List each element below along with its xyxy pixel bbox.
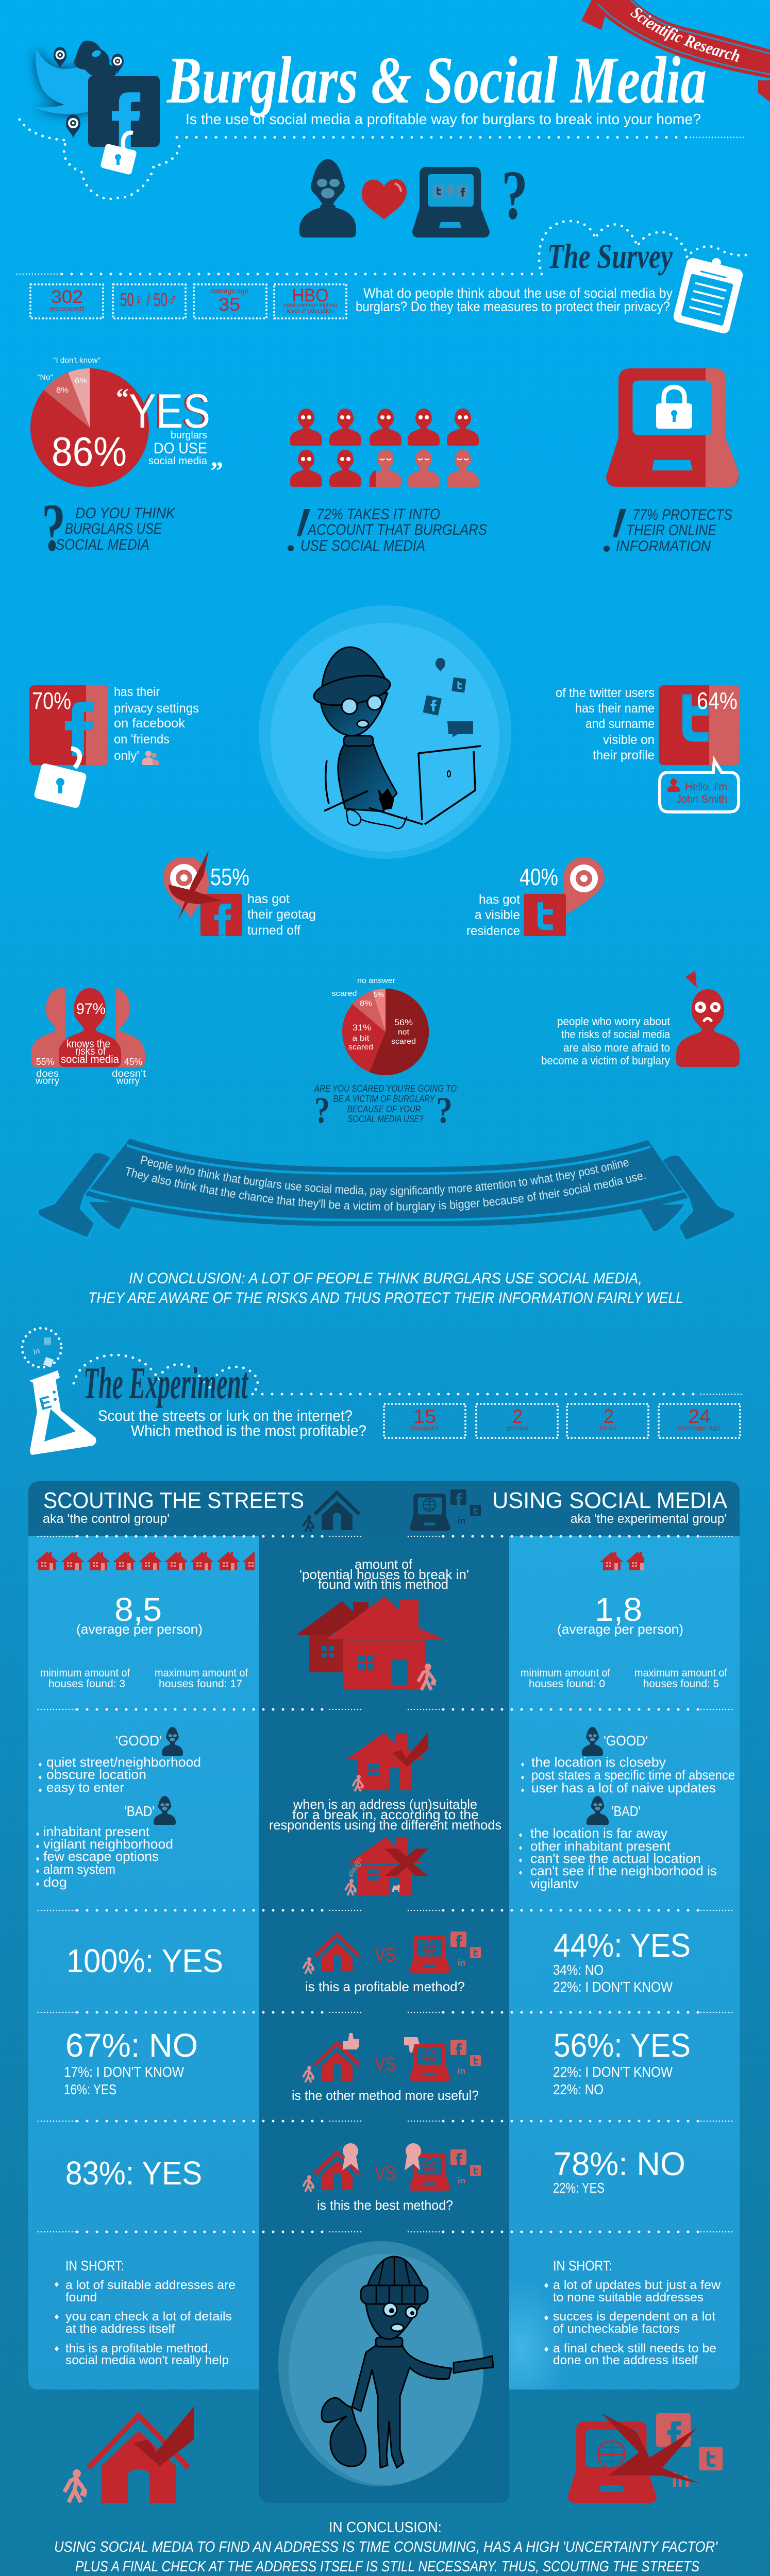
- burglar icon: [299, 159, 356, 238]
- houses found row: center: [296, 1556, 469, 1690]
- min and max: minimum amount of: [40, 1667, 130, 1679]
- in short: left: this is a profitable method,: [65, 2342, 211, 2355]
- know the risks: 97 percent: 45%: [124, 1057, 142, 1067]
- survey intro text: [356, 285, 673, 314]
- spotlight circle: [259, 605, 511, 859]
- visible residence: 40 percent: has got: [479, 892, 520, 907]
- icon: flask with social bubble: [22, 1328, 96, 1455]
- in short: right: [544, 2258, 721, 2367]
- know the risks: 97 percent: social media: [61, 1054, 119, 1065]
- hat: [367, 2257, 424, 2287]
- question: are you scared: BE A VICTIM OF BURGLARY: [333, 1094, 436, 1104]
- know the risks: 97 percent: risks of: [75, 1045, 106, 1057]
- experiment stat boxes: average age: [678, 1424, 721, 1431]
- survey intro text: What do people think about the use of social media by: [363, 285, 673, 301]
- mouth: [391, 2324, 404, 2331]
- geotag off: 55 percent: 55%: [210, 863, 249, 890]
- houses found row: left: houses found: 3: [48, 1678, 125, 1690]
- houses found row: left: maximum amount of: [155, 1667, 248, 1679]
- pie chart: scared of burglary: not: [398, 1028, 410, 1037]
- question row: is this a profitable method: [66, 1927, 691, 1995]
- pie chart: scared of burglary: 5%: [374, 990, 384, 999]
- question: do you think burglars use social media: SOCIAL MEDIA: [56, 536, 149, 553]
- suitability: right: user has a lot of naive updates: [531, 1780, 716, 1795]
- question row: is the other method more useful: 56%: YES: [554, 2027, 691, 2064]
- face: [366, 2303, 422, 2339]
- houses found row: center: 'potential houses to break in': [299, 1567, 469, 1582]
- houses found row: left: houses found: 17: [159, 1678, 242, 1690]
- pie chart: do burglars use social media: "I don't know": [53, 356, 101, 365]
- in short: right: a final check still needs to be: [553, 2342, 716, 2355]
- question row: is this the best method: is this the best method?: [317, 2197, 453, 2213]
- pie chart: scared of burglary: no answer: [357, 976, 395, 985]
- privacy text: on 'friends: [114, 732, 170, 747]
- question row: is the other method more useful: 16%: YES: [64, 2081, 116, 2097]
- subtitle: Is the use of social media a profitable way for burglars to break into your home?: [186, 111, 701, 128]
- question row: is this the best method: [65, 2143, 685, 2213]
- suitability: right: the location is far away: [530, 1825, 667, 1841]
- in short: left: [55, 2258, 236, 2367]
- banner band: [85, 1139, 688, 1226]
- geotag off: 55 percent: their geotag: [247, 907, 316, 922]
- suitability: right: the location is closeby: [531, 1754, 666, 1770]
- stat: gender: [113, 284, 186, 318]
- suitability: center: for a break in, according to the: [292, 1807, 479, 1822]
- worried person: become a victim of burglary: [541, 1054, 670, 1067]
- question row: is this the best method: 83%: YES: [65, 2155, 202, 2192]
- pie chart: do burglars use social media: 8%: [56, 386, 69, 395]
- question row: is the other method more useful: 67%: NO: [65, 2027, 198, 2064]
- worried person: people who worry about: [557, 1015, 670, 1028]
- suitability: right: 'GOOD': [604, 1733, 648, 1749]
- privacy text: has their: [114, 685, 160, 699]
- experiment stat boxes: 2: [512, 1406, 523, 1428]
- banner: [36, 1139, 737, 1243]
- mouse and cable: [346, 810, 407, 828]
- header: scouting the streets: SCOUTING THE STREETS: [43, 1488, 304, 1513]
- header: using social media: in: [458, 1516, 465, 1526]
- privacy text: [114, 685, 199, 763]
- houses found row: center: found with this method: [318, 1577, 448, 1592]
- header: using social media: [410, 1488, 728, 1531]
- icon: tablet with cross: in: [672, 2469, 690, 2492]
- in short: left: at the address itself: [65, 2322, 175, 2336]
- know the risks: 97 percent: 55%: [36, 1057, 54, 1067]
- facebook privacy: 70 percent: [29, 685, 199, 809]
- quote: yes burglars do use social media: ”: [210, 456, 223, 485]
- name text: [556, 686, 655, 762]
- medal: [342, 2154, 359, 2171]
- question: do you think burglars use social media: DO YOU THINK: [75, 505, 176, 522]
- question: are you scared: [314, 1083, 457, 1131]
- suitability: center: respondents using the different methods: [269, 1817, 501, 1833]
- question: are you scared: ?: [436, 1090, 453, 1131]
- quote: yes burglars do use social media: YES: [129, 384, 210, 438]
- suitability: left: easy to enter: [46, 1780, 124, 1795]
- conclusion: survey: IN CONCLUSION: A LOT OF PEOPLE THINK BURGLARS USE SOCIAL MEDIA,: [129, 1270, 642, 1287]
- visible residence: 40 percent: [466, 857, 605, 938]
- houses found row: right: houses found: 5: [643, 1678, 719, 1690]
- speech bubble: hello I'm John Smith: Hello, I'm: [685, 781, 727, 793]
- eyes: [342, 699, 357, 714]
- stat: education: level of education: [287, 307, 334, 314]
- finding: 72 percent: USE SOCIAL MEDIA: [300, 537, 425, 554]
- back house: [296, 1601, 369, 1672]
- mouth: [357, 720, 369, 727]
- suitability: left: quiet street/neighborhood: [46, 1754, 201, 1770]
- question row: is the other method more useful: [64, 2027, 691, 2103]
- flashlight: [454, 2356, 493, 2373]
- experiment intro text: Which method is the most profitable?: [131, 1422, 366, 1439]
- suitability: right: [519, 1727, 735, 1891]
- question row: is this a profitable method: 22%: I DON'T KNOW: [553, 1979, 673, 1995]
- question row: is this the best method: in: [458, 2176, 465, 2185]
- pie chart: do burglars use social media: "No": [37, 373, 53, 382]
- twitter profile: 64 percent: [556, 685, 740, 812]
- suitability: left: dog: [43, 1874, 67, 1890]
- header: using social media: aka 'the experimental group': [571, 1512, 727, 1526]
- suitability: right: can't see if the neighborhood is: [530, 1863, 717, 1878]
- houses found row: right: houses found: 0: [529, 1678, 605, 1690]
- experiment intro text: [98, 1408, 366, 1439]
- speech bubble: hello I'm John Smith: [660, 760, 739, 812]
- finding: 77 percent: [604, 506, 732, 555]
- legs and torso: [352, 2346, 451, 2468]
- experiment stat boxes: groups: [507, 1424, 528, 1431]
- question: are you scared: BECAUSE OF YOUR: [347, 1104, 421, 1114]
- beanie hat: [322, 647, 388, 685]
- conclusion: experiment: [54, 2519, 718, 2576]
- experiment intro text: Scout the streets or lurk on the internet?: [98, 1408, 353, 1425]
- conclusion: experiment: IN CONCLUSION:: [329, 2519, 442, 2536]
- know the risks: 97 percent: does: [36, 1069, 59, 1079]
- privacy text: only': [114, 749, 139, 763]
- finding: 77 percent: THEIR ONLINE: [626, 522, 717, 539]
- suitability: right: post states a specific time of absence: [531, 1767, 735, 1783]
- icon: clipboard: [672, 251, 745, 335]
- question row: is this a profitable method: VS: [375, 1944, 396, 1966]
- laptop icon: [412, 167, 490, 238]
- survey stat boxes: [30, 284, 346, 318]
- suitability: right: can't see the actual location: [530, 1851, 701, 1866]
- worried person: [541, 971, 740, 1067]
- houses found row: right: [521, 1552, 727, 1690]
- stat: age: [194, 284, 266, 318]
- question: do you think burglars use social media: [42, 489, 176, 565]
- name text: visible on: [603, 733, 655, 747]
- pie chart: do burglars use social media: 86%: [52, 429, 127, 474]
- house with cross: #%@!: [346, 1856, 364, 1879]
- burglar hand: [379, 788, 394, 810]
- burglar body: [338, 744, 397, 811]
- loot bag: [322, 2398, 366, 2466]
- houses found row: right: minimum amount of: [521, 1667, 610, 1679]
- in short: left: a lot of suitable addresses are: [65, 2278, 236, 2292]
- pie chart: scared of burglary: 31%: [353, 1023, 371, 1032]
- question row: is this the best method: 22%: YES: [553, 2180, 605, 2196]
- question row: is the other method more useful: in: [458, 2066, 465, 2076]
- front house: [326, 1597, 444, 1690]
- conclusion: survey: THEY ARE AWARE OF THE RISKS AND THUS PROTECT THEIR INFORMATION FAIRLY WELL: [88, 1290, 683, 1307]
- pie chart: scared of burglary: 8%: [360, 999, 372, 1008]
- suitability: right: other inhabitant present: [530, 1838, 671, 1854]
- icon: friends: [142, 751, 159, 765]
- in short: right: IN SHORT:: [553, 2258, 612, 2274]
- finding: 72 percent: [288, 506, 487, 554]
- question row: is this a profitable method: in: [458, 1958, 465, 1968]
- question: do you think burglars use social media: ?: [42, 489, 65, 565]
- geotag off: 55 percent: has got: [247, 892, 290, 906]
- suitability: left: alarm system: [43, 1861, 115, 1877]
- people grid: 72 percent: [290, 409, 479, 487]
- visible residence: 40 percent: 40%: [520, 863, 558, 890]
- stat: gender: 50♀ / 50♂: [120, 289, 177, 310]
- visible residence: 40 percent: residence: [466, 924, 520, 938]
- finding: 72 percent: 72% TAKES IT INTO: [316, 506, 440, 523]
- in short: left: found: [65, 2291, 97, 2304]
- know the risks: 97 percent: knows the: [66, 1038, 110, 1050]
- suitability: left: inhabitant present: [43, 1824, 150, 1839]
- houses found row: left: (average per person): [76, 1621, 203, 1637]
- question row: is the other method more useful: 22%: I DON'T KNOW: [553, 2064, 673, 2080]
- houses found row: right: 1,8: [595, 1591, 642, 1628]
- worried person: are also more afraid to: [563, 1041, 670, 1054]
- pie chart: scared of burglary: scared: [348, 1043, 373, 1052]
- worried person: the risks of social media: [561, 1028, 671, 1041]
- table dividers: [38, 1536, 732, 2232]
- speech bubble: hello I'm John Smith: John Smith: [676, 793, 727, 805]
- question: are you scared: ARE YOU SCARED YOU'RE GOING TO: [314, 1083, 457, 1094]
- laptop and desk lines: [324, 746, 481, 824]
- name text: has their name: [575, 701, 655, 716]
- name text: of the twitter users: [556, 686, 655, 700]
- house with cross: [345, 1837, 428, 1895]
- know the risks: 97 percent: [31, 988, 146, 1087]
- suitability: left: vigilant neighborhood: [43, 1836, 173, 1852]
- pie chart: scared of burglary: scared: [391, 1037, 416, 1046]
- finding: 77 percent: INFORMATION: [616, 538, 711, 555]
- finding: 72 percent: ACCOUNT THAT BURGLARS: [307, 521, 487, 538]
- houses found row: right: (average per person): [557, 1621, 683, 1637]
- icon: flask with social bubble: E: [37, 1392, 54, 1414]
- pie chart: scared of burglary: [332, 976, 429, 1075]
- heading: the survey: [17, 221, 746, 276]
- know the risks: 97 percent: 97%: [76, 1001, 106, 1018]
- conclusion: survey: [88, 1270, 683, 1307]
- stat: respondents: respondents: [49, 304, 85, 312]
- stat: age: average age: [210, 286, 248, 295]
- in short: right: a lot of updates but just a few: [553, 2278, 721, 2292]
- privacy text: privacy settings: [114, 701, 199, 716]
- houses found row: left: [35, 1552, 266, 1690]
- heading: the experiment: The Experiment: [83, 1359, 248, 1409]
- stat: education: [274, 284, 346, 318]
- question row: is the other method more useful: 22%: NO: [553, 2081, 604, 2097]
- banner: They also think that the chance that they'll be a victim of burglary is bigger because of their social media use.: [126, 1166, 646, 1213]
- question row: is this a profitable method: 44%: YES: [554, 1927, 691, 1964]
- burglar at the computer: [312, 647, 481, 828]
- heart icon: [362, 179, 407, 219]
- comparison table panels: [28, 1481, 740, 2503]
- pie chart: scared of burglary: 56%: [394, 1018, 413, 1027]
- question row: is this a profitable method: 34%: NO: [553, 1962, 604, 1978]
- experiment stat boxes: 'burglars': [410, 1424, 440, 1431]
- neck: [344, 736, 373, 746]
- ribbon: scientific research: [581, 0, 770, 102]
- question: do you think burglars use social media: BURGLARS USE: [65, 520, 162, 537]
- burglar loves social media?: [299, 157, 528, 238]
- quote: yes burglars do use social media: burglars: [171, 430, 207, 441]
- quote: yes burglars do use social media: YES: [127, 384, 208, 438]
- neck: [376, 2337, 403, 2347]
- house icons: [35, 1552, 266, 1570]
- in short: left: social media won't really help: [65, 2353, 229, 2367]
- stat: education: HBO: [292, 285, 329, 306]
- know the risks: 97 percent: doesn't: [112, 1069, 146, 1079]
- burglar face: [321, 693, 388, 736]
- experiment stat boxes: [384, 1404, 740, 1438]
- suitability: left: 'GOOD': [115, 1733, 162, 1749]
- in short: right: to none suitable addresses: [553, 2291, 704, 2304]
- social icons floating: [423, 658, 473, 737]
- question row: is this a profitable method: is this a profitable method?: [305, 1979, 465, 1994]
- question row: is the other method more useful: 17%: I DON'T KNOW: [64, 2064, 184, 2080]
- dotted connector: title: [20, 120, 746, 199]
- icon: flask with social bubble: in: [32, 1346, 41, 1357]
- geotag off: 55 percent: turned off: [247, 923, 300, 938]
- red laptop with lock: [606, 368, 739, 487]
- header: scouting the streets: aka 'the control group': [43, 1512, 170, 1526]
- in short: right: done on the address itself: [553, 2353, 698, 2367]
- suitability: left: [36, 1727, 201, 1890]
- burglar with flashlight and loot: [322, 2257, 493, 2468]
- suitability: left: obscure location: [46, 1767, 146, 1782]
- experiment stat boxes: 15: [413, 1406, 436, 1428]
- question row: is the other method more useful: VS: [375, 2054, 396, 2075]
- know the risks: 97 percent: worry: [35, 1076, 59, 1087]
- quote: yes burglars do use social media: “: [116, 383, 129, 412]
- icon: tablet with cross: [568, 2413, 723, 2503]
- houses found row: right: maximum amount of: [634, 1667, 727, 1679]
- suitability: right: 'BAD': [611, 1803, 641, 1819]
- name text: and surname: [585, 717, 655, 731]
- question: are you scared: SOCIAL MEDIA USE?: [347, 1114, 424, 1124]
- question row: is this the best method: VS: [375, 2163, 396, 2184]
- pie chart: do burglars use social media: [30, 356, 149, 487]
- heading: the experiment: [74, 1355, 744, 1409]
- eyes: [383, 2303, 397, 2316]
- in short: left: IN SHORT:: [65, 2258, 124, 2274]
- question: are you scared: ?: [314, 1090, 330, 1131]
- experiment stat boxes: hours: [600, 1424, 616, 1431]
- in short: left: you can check a lot of details: [65, 2310, 232, 2324]
- pie chart: do burglars use social media: 6%: [75, 377, 87, 385]
- in short: right: of uncheckable factors: [553, 2322, 680, 2336]
- geotag off: 55 percent: [163, 850, 316, 938]
- experiment stat boxes: 2: [604, 1406, 614, 1428]
- ribbon text: Scientific Research: [630, 8, 740, 62]
- quote: yes burglars do use social media: [116, 383, 223, 485]
- logo: twitter bird, facebook and open lock: [35, 41, 160, 175]
- header: using social media: USING SOCIAL MEDIA: [492, 1488, 728, 1513]
- question row: is the other method more useful: is the other method more useful?: [292, 2088, 479, 2103]
- stat: respondents: [30, 284, 103, 318]
- question mark: ?: [501, 157, 528, 234]
- question row: is this the best method: 78%: NO: [554, 2145, 685, 2182]
- privacy text: on facebook: [114, 716, 186, 731]
- icon: house with check: [64, 2406, 194, 2503]
- suitability: left: 'BAD': [124, 1803, 155, 1819]
- survey intro text: burglars? Do they take measures to protect their privacy?: [356, 299, 670, 314]
- suitability: center: [269, 1732, 501, 1895]
- visible residence: 40 percent: a visible: [475, 908, 520, 922]
- suitability: right: vigilantv: [530, 1876, 578, 1891]
- stat: respondents: 302: [51, 287, 83, 307]
- twitter profile: 64 percent: 64%: [697, 687, 738, 714]
- quote: yes burglars do use social media: DO USE: [154, 440, 207, 457]
- thumbs down: [404, 2037, 420, 2053]
- experiment stat boxes: 24: [688, 1406, 711, 1428]
- banner tails: [37, 1151, 137, 1239]
- suitability: center: when is an address (un)suitable: [293, 1797, 477, 1812]
- facebook privacy: 70 percent: 70%: [32, 687, 71, 714]
- in short: right: succes is dependent on a lot: [553, 2310, 715, 2324]
- medal: [405, 2154, 420, 2171]
- finding: 77 percent: 77% PROTECTS: [632, 506, 732, 523]
- houses found row: center: amount of: [355, 1556, 413, 1572]
- stat: age: 35: [219, 295, 240, 315]
- average: 8,5: [114, 1591, 162, 1628]
- spotlight: [278, 2241, 483, 2486]
- header: scouting the streets: [43, 1488, 359, 1532]
- quote: yes burglars do use social media: social media: [148, 455, 208, 467]
- pie chart: scared of burglary: a bit: [353, 1034, 370, 1043]
- suitability: left: few escape options: [43, 1849, 159, 1864]
- house with check: [347, 1732, 428, 1791]
- heading: the survey: The Survey: [547, 236, 673, 276]
- thumbs up: [343, 2033, 359, 2049]
- pie chart: scared of burglary: scared: [332, 989, 357, 998]
- know the risks: 97 percent: worry: [116, 1076, 140, 1087]
- lock: [34, 749, 87, 809]
- banner text: People who think that burglars use social media, pay significantly more attention to what they post online.: [140, 1156, 629, 1197]
- name text: their profile: [593, 748, 655, 762]
- stat: education: most common highest: [283, 301, 338, 309]
- question row: is this a profitable method: 100%: YES: [66, 1942, 223, 1979]
